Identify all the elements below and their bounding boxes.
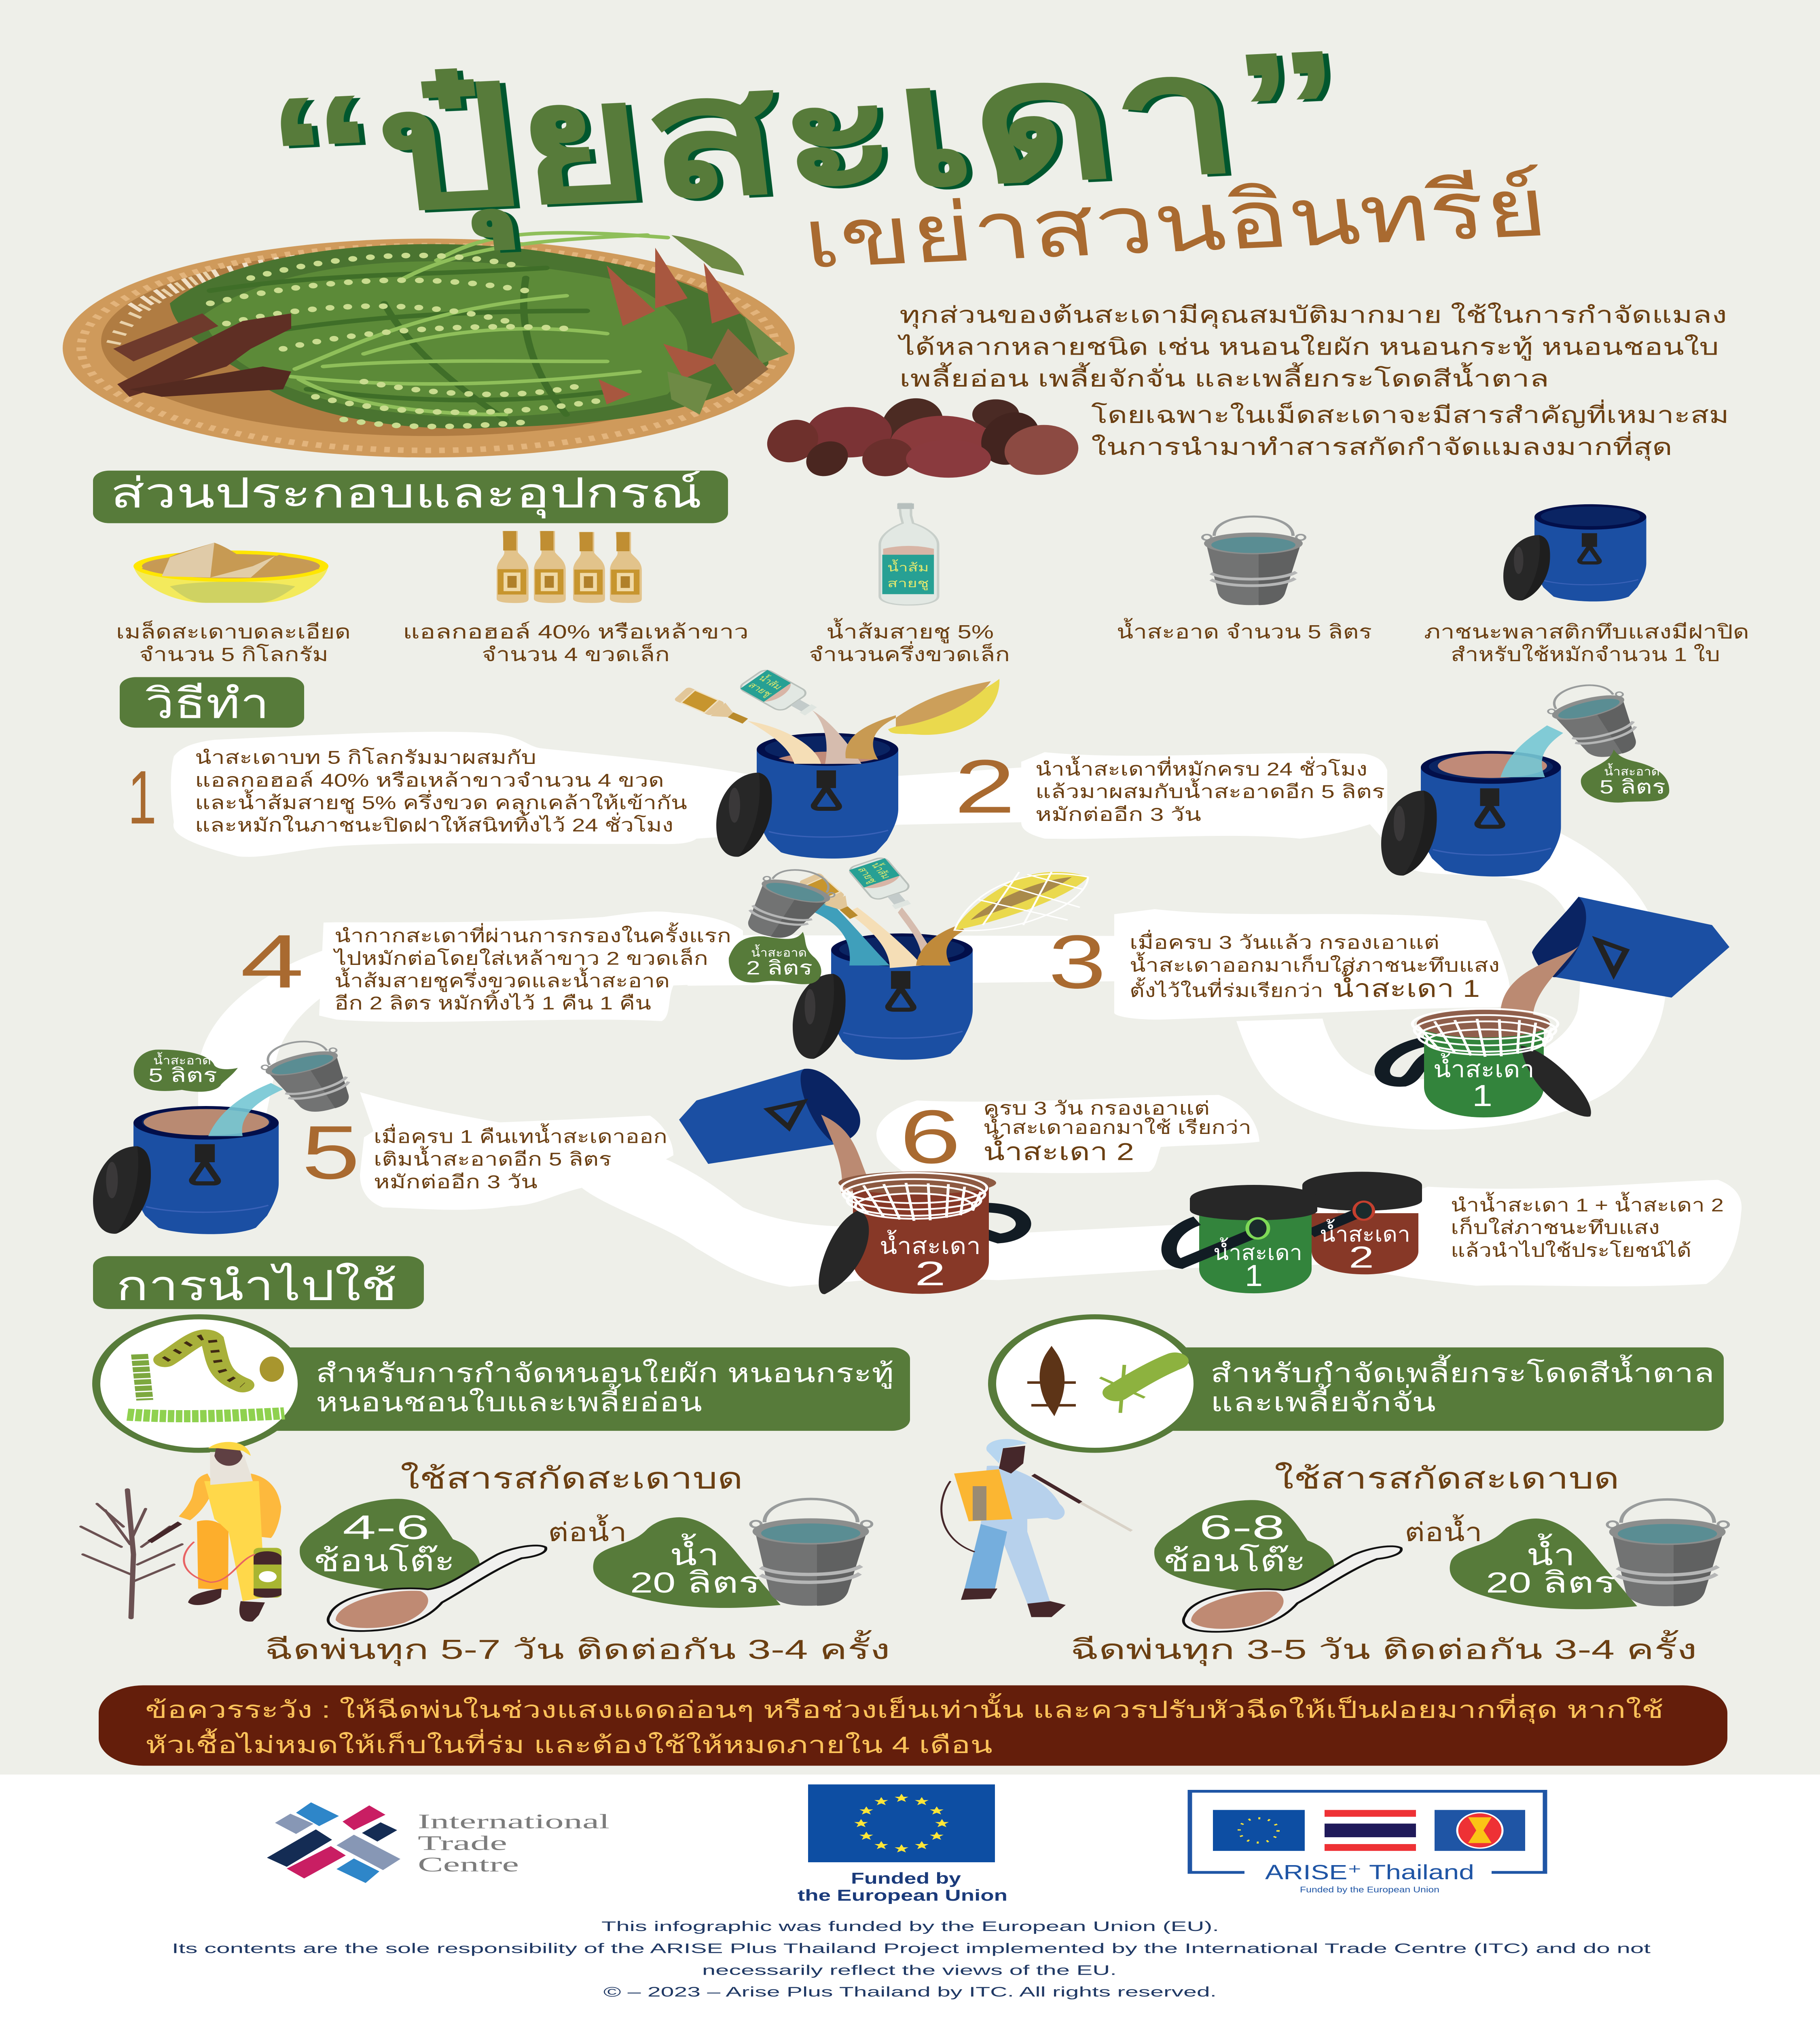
callout: 2 litres of clean water — [729, 932, 821, 984]
title: “ปุ๋ยสะเดา” — [257, 15, 1357, 261]
logo: ARISE Plus Thailand: ARISE⁺ Thailand — [1265, 1861, 1474, 1884]
heading: how to use: การนำไปใช้ — [116, 1263, 397, 1309]
footer white panel background — [0, 1775, 1820, 2022]
step 1 — [128, 747, 687, 840]
ingredient labels: น้ำส้มสายชู 5% — [826, 618, 994, 643]
callout: 2 litres of clean water: น้ำสะอาด — [751, 944, 807, 959]
step 6: น้ำสะเดาออกมาใช้ เรียกว่า — [983, 1114, 1251, 1138]
heading: ingredients and equipment: ส่วนประกอบและอุปกรณ์ — [110, 470, 702, 518]
dosage: left recipe: 20 ลิตร — [630, 1567, 760, 1599]
step 4 illustration: barrel with pouring ingredients — [732, 856, 1088, 1060]
dosage: right recipe: 6-8 — [1199, 1508, 1285, 1546]
callout: 5 litres of clean water: น้ำสะอาด — [1604, 763, 1660, 778]
dosage: right recipe — [1070, 1462, 1729, 1666]
step 6 illustration: tipped barrel pouring into filter and red bucket: น้ำสะเดา — [880, 1230, 981, 1259]
dosage: right recipe: 20 ลิตร — [1486, 1567, 1616, 1599]
step 5: เมื่อครบ 1 คืนเทน้ำสะเดาออก — [374, 1123, 667, 1147]
step 2: แล้วมาผสมกับน้ำสะอาดอีก 5 ลิตร — [1035, 778, 1385, 802]
disclaimer text: © – 2023 – Arise Plus Thailand by ITC. All rights reserved. — [603, 1984, 1217, 1999]
callout: 5 litres of clean water — [1581, 749, 1669, 803]
step 1: นำสะเดาบท 5 กิโลกรัมมาผสมกับ — [195, 747, 536, 768]
step 5: เติมน้ำสะอาดอีก 5 ลิตร — [374, 1146, 612, 1170]
step 1: แอลกอฮอล์ 40% หรือเหล้าขาวจำนวน 4 ขวด — [195, 770, 664, 791]
step 6 — [899, 1095, 1251, 1179]
callout: 5 litres of clean water: น้ำสะอาด — [153, 1052, 211, 1067]
intro text — [897, 302, 1727, 391]
ingredient labels: จำนวน 5 กิโลกรัม — [139, 643, 328, 665]
disclaimer text: necessarily reflect the views of the EU. — [702, 1962, 1117, 1978]
ingredient labels: สำหรับใช้หมักจำนวน 1 ใบ — [1451, 644, 1720, 665]
step 1: และน้ำส้มสายชู 5% ครึ่งขวด คลุกเคล้าให้เข้ากัน — [195, 789, 687, 814]
dosage: left recipe: ฉีดพ่นทุก 5-7 วัน ติดต่อกัน 3-4 ครั้ง — [265, 1630, 890, 1666]
callout: 5 litres of clean water: 5 ลิตร — [148, 1065, 217, 1086]
intro text: เพลี้ยอ่อน เพลี้ยจักจั่น และเพลี้ยกระโดดสีน้ำตาล — [899, 362, 1549, 391]
step 4 — [240, 919, 731, 1013]
dosage: right recipe: ฉีดพ่นทุก 3-5 วัน ติดต่อกัน 3-4 ครั้ง — [1070, 1630, 1697, 1666]
ingredient labels: จำนวนครึ่งขวดเล็ก — [809, 641, 1010, 665]
icon: farmer in yellow suit spraying — [150, 1442, 281, 1622]
final step text — [1451, 1192, 1724, 1261]
icon: bare tree — [81, 1490, 182, 1618]
intro text: seeds note — [1091, 399, 1729, 461]
step 6: 6 — [899, 1095, 961, 1179]
step 3 — [1048, 920, 1500, 1005]
logo: International Trade Centre: Trade — [418, 1832, 507, 1855]
logo: ARISE Plus Thailand: Funded by the European Union — [1300, 1885, 1439, 1894]
panel: use against planthoppers and leafhoppers: และเพลี้ยจักจั่น — [1211, 1383, 1436, 1417]
step 1 illustration: barrel with pouring ingredients — [673, 668, 999, 859]
step 1: และหมักในภาชนะปิดฝาให้สนิททิ้งไว้ 24 ชั่วโมง — [195, 812, 673, 835]
dosage: left recipe: ใช้สารสกัดสะเดาบด — [400, 1462, 743, 1495]
logo: International Trade Centre — [267, 1802, 609, 1883]
illustration: finished buckets 1 and 2 — [1169, 1172, 1422, 1293]
icon: neem seeds — [761, 395, 1090, 481]
final step text: แล้วนำไปใช้ประโยชน์ได้ — [1451, 1240, 1691, 1261]
subtitle: เขย่าสวนอินทรีย์ — [799, 162, 1551, 285]
dosage: right recipe: ใช้สารสกัดสะเดาบด — [1274, 1462, 1619, 1495]
logo: International Trade Centre: Centre — [418, 1853, 519, 1876]
logo: European Union flag: the European Union — [798, 1887, 1007, 1904]
step 2: 2 — [954, 745, 1016, 829]
icon: four small bottles of alcohol — [497, 531, 642, 603]
dosage: right recipe: ช้อนโต๊ะ — [1163, 1544, 1306, 1578]
step 3: 3 — [1048, 920, 1106, 1005]
dosage: left recipe — [265, 1462, 890, 1666]
callout: 5 litres of clean water — [134, 1049, 238, 1092]
final step text: นำน้ำสะเดา 1 + น้ำสะเดา 2 — [1451, 1192, 1724, 1215]
dosage: left recipe: ช้อนโต๊ะ — [313, 1544, 455, 1578]
step 6 illustration: tipped barrel pouring into filter and red bucket — [679, 1069, 1024, 1294]
step 3 illustration: tipped barrel pouring into filter and green bucket: 1 — [1472, 1079, 1492, 1113]
panel: use against planthoppers and leafhoppers: สำหรับกำจัดเพลี้ยกระโดดสีน้ำตาล — [1211, 1354, 1714, 1388]
step 2 — [954, 745, 1385, 829]
logo: European Union flag — [798, 1784, 1007, 1904]
step 3: น้ำสะเดา 1 — [1333, 971, 1480, 1002]
final step text: เก็บใส่ภาชนะทึบแสง — [1451, 1217, 1660, 1238]
callout: 5 litres of clean water: 5 ลิตร — [1600, 776, 1666, 797]
step 4: นำกากสะเดาที่ผ่านการกรองในครั้งแรก — [334, 922, 731, 946]
step 2: นำน้ำสะเดาที่หมักครบ 24 ชั่วโมง — [1035, 756, 1367, 779]
step 3: น้ำสะเดาออกมาเก็บใส่ภาชนะทึบแสง — [1130, 952, 1500, 975]
dosage: right recipe: น้ำ — [1526, 1533, 1575, 1571]
panel: use against planthoppers and leafhoppers — [992, 1317, 1724, 1450]
step 4: น้ำส้มสายชูครึ่งขวดและน้ำสะอาด — [334, 968, 670, 992]
step 2: หมักต่ออีก 3 วัน — [1035, 804, 1201, 825]
icon: worker in blue suit with backpack sprayer — [942, 1439, 1132, 1617]
intro text: seeds note: ในการนำมาทำสารสกัดกำจัดแมลงมากที่สุด — [1091, 431, 1672, 461]
white flow ribbon and step backgrounds — [171, 732, 1742, 1287]
ingredient labels: น้ำสะอาด จำนวน 5 ลิตร — [1117, 618, 1372, 643]
warning panel: หัวเชื้อไม่หมดให้เก็บในที่ร่ม และต้องใช้ให้หมดภายใน 4 เดือน — [145, 1728, 993, 1758]
icon: bowl of ground neem seeds — [133, 543, 328, 603]
dosage: right recipe: ต่อน้ำ — [1405, 1514, 1482, 1546]
icon: plastic barrel with lid — [1503, 504, 1646, 601]
dosage: left recipe: ต่อน้ำ — [548, 1514, 627, 1546]
step 1: 1 — [128, 755, 157, 840]
illustration: finished buckets 1 and 2: น้ำสะเดา — [1320, 1219, 1410, 1246]
dosage: left recipe: น้ำ — [670, 1533, 720, 1571]
step 3: ตั้งไว้ในที่ร่มเรียกว่า — [1130, 977, 1323, 1001]
step 3 illustration: tipped barrel pouring into filter and green bucket — [1382, 897, 1729, 1117]
disclaimer text: Its contents are the sole responsibility of the ARISE Plus Thailand Project implemented by the International Trade Centre (ITC) and do not — [172, 1940, 1651, 1956]
ingredient labels: เมล็ดสะเดาบดละเอียด — [116, 621, 351, 643]
panel: use against caterpillars and aphids — [96, 1317, 910, 1450]
warning panel — [99, 1686, 1727, 1766]
panel: use against caterpillars and aphids: สำหรับการกำจัดหนอนใยผัก หนอนกระทู้ — [316, 1359, 894, 1389]
step 4: อีก 2 ลิตร หมักทิ้งไว้ 1 คืน 1 คืน — [334, 990, 651, 1013]
step 5 illustration: barrel and water bucket — [93, 1034, 369, 1234]
step 4: ไปหมักต่อโดยใส่เหล้าขาว 2 ขวดเล็ก — [332, 948, 708, 969]
ingredient labels — [116, 618, 1749, 665]
logo: ARISE Plus Thailand — [1190, 1791, 1545, 1894]
callout: 2 litres of clean water: 2 ลิตร — [746, 957, 813, 979]
step 3 illustration: tipped barrel pouring into filter and green bucket: น้ำสะเดา — [1433, 1053, 1534, 1082]
ingredient labels: แอลกอฮอล์ 40% หรือเหล้าขาว — [403, 622, 749, 643]
step 3: เมื่อครบ 3 วันแล้ว กรองเอาแต่ — [1130, 930, 1439, 953]
step 6: น้ำสะเดา 2 — [983, 1134, 1134, 1165]
logo: European Union flag: Funded by — [851, 1870, 961, 1887]
disclaimer text — [172, 1918, 1651, 1999]
icon: bottle of vinegar — [880, 503, 938, 605]
heading: method: วิธีทำ — [145, 681, 269, 727]
disclaimer text: This infographic was funded by the European Union (EU). — [601, 1918, 1219, 1934]
icon: water bucket — [1202, 516, 1305, 605]
step 5 — [302, 1110, 667, 1195]
ingredient labels: ภาชนะพลาสติกทึบแสงมีฝาปิด — [1424, 622, 1749, 643]
step 5: 5 — [302, 1110, 360, 1195]
dosage: left recipe: 4-6 — [343, 1508, 430, 1546]
step 6: ครบ 3 วัน กรองเอาแต่ — [983, 1098, 1210, 1119]
step 4: 4 — [240, 919, 304, 1004]
ingredient labels: จำนวน 4 ขวดเล็ก — [482, 643, 670, 665]
illustration: finished buckets 1 and 2: 1 — [1245, 1259, 1263, 1292]
logo: International Trade Centre: International — [418, 1810, 609, 1833]
photo: neem leaves in a woven basket — [63, 233, 795, 457]
panel: use against caterpillars and aphids: หนอนชอนใบและเพลี้ยอ่อน — [316, 1383, 702, 1417]
step 6 illustration: tipped barrel pouring into filter and red bucket: 2 — [915, 1254, 946, 1292]
illustration: finished buckets 1 and 2: 2 — [1349, 1240, 1374, 1274]
step 5: หมักต่ออีก 3 วัน — [374, 1172, 538, 1192]
illustration: finished buckets 1 and 2: น้ำสะเดา — [1213, 1237, 1302, 1265]
step 2 illustration: barrel and water bucket — [1381, 678, 1656, 876]
